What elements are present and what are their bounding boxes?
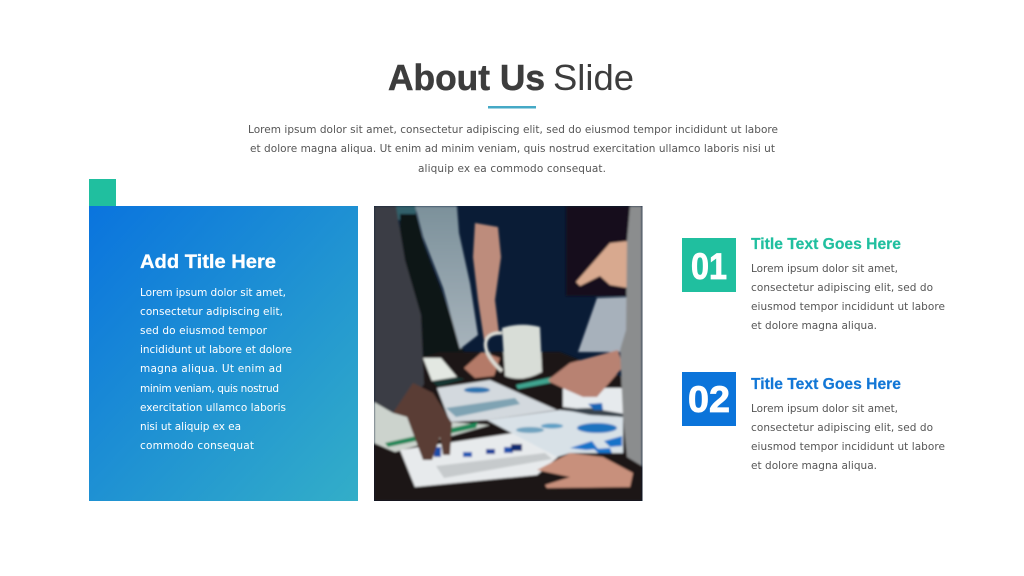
card body text: nisi ut aliquip ex ea bbox=[140, 421, 241, 433]
hand holding pen bbox=[548, 350, 623, 397]
title: Slide bbox=[553, 57, 634, 98]
card body text: Lorem ipsum dolor sit amet, bbox=[140, 287, 286, 299]
laptop bbox=[578, 297, 628, 352]
card body text: exercitation ullamco laboris bbox=[140, 402, 286, 414]
panel: blue text card bbox=[89, 206, 358, 501]
number badge 01 bbox=[682, 238, 736, 292]
paper left green chart bbox=[374, 402, 490, 452]
dark vest bbox=[400, 214, 464, 372]
dark upper right backdrop bbox=[566, 206, 636, 296]
teal glimpse behind jacket bbox=[394, 206, 416, 220]
item 01 body: eiusmod tempor incididunt ut labore bbox=[751, 301, 945, 313]
item 02 bbox=[682, 372, 945, 472]
light shirt bbox=[415, 206, 478, 349]
intro paragraph bbox=[248, 124, 778, 175]
lower right hand bbox=[537, 453, 633, 488]
card heading: Add Title Here bbox=[140, 251, 276, 273]
pointing hand bbox=[576, 241, 628, 288]
pen bbox=[514, 376, 552, 391]
title bbox=[388, 57, 634, 98]
title: About Us bbox=[388, 57, 545, 98]
item 01 body: et dolore magna aliqua. bbox=[751, 320, 877, 332]
intro paragraph: et dolore magna aliqua. Ut enim ad minim veniam, quis nostrud exercitation ullamco laboris nisi ut bbox=[250, 143, 775, 155]
card body text bbox=[140, 287, 292, 452]
item 01 bbox=[682, 236, 945, 332]
card body text: sed do eiusmod tempor bbox=[140, 325, 268, 337]
card body text: magna aliqua. Ut enim ad bbox=[140, 363, 282, 375]
right sleeve bbox=[620, 206, 642, 466]
item 02 body: Lorem ipsum dolor sit amet, bbox=[751, 403, 898, 415]
item 02 body: et dolore magna aliqua. bbox=[751, 460, 877, 472]
card body text: minim veniam, quis nostrud bbox=[140, 383, 279, 395]
item 02 heading: Title Text Goes Here bbox=[751, 376, 901, 393]
card body text: consectetur adipiscing elit, bbox=[140, 306, 283, 318]
table bbox=[374, 352, 642, 501]
title underline bbox=[488, 106, 536, 108]
left dark jacket bbox=[374, 206, 424, 413]
paper lower bars bbox=[400, 433, 558, 487]
photo: team reviewing charts at a table bbox=[374, 206, 643, 501]
intro paragraph: aliquip ex ea commodo consequat. bbox=[418, 163, 606, 175]
tablet bbox=[423, 358, 457, 381]
green accent square bbox=[89, 179, 116, 206]
number badge 02: 02 bbox=[688, 379, 730, 420]
left hand on paper bbox=[393, 383, 452, 460]
card body text: commodo consequat bbox=[140, 440, 254, 452]
item 01 body: Lorem ipsum dolor sit amet, bbox=[751, 263, 898, 275]
standing person's arm bbox=[473, 223, 501, 340]
item 02 body bbox=[751, 403, 945, 472]
item 01 body: consectetur adipiscing elit, sed do bbox=[751, 282, 933, 294]
resting hand bbox=[464, 352, 500, 378]
item 01 body bbox=[751, 263, 945, 332]
item 02 body: eiusmod tempor incididunt ut labore bbox=[751, 441, 945, 453]
mug bbox=[502, 325, 542, 379]
intro paragraph: Lorem ipsum dolor sit amet, consectetur adipiscing elit, sed do eiusmod tempor incididunt ut labore bbox=[248, 124, 778, 136]
item 02 body: consectetur adipiscing elit, sed do bbox=[751, 422, 933, 434]
paper top chart bbox=[437, 380, 557, 422]
paper right pie charts bbox=[487, 410, 623, 457]
number badge 01: 01 bbox=[691, 246, 727, 287]
number badge 02 bbox=[682, 372, 736, 426]
item 01 heading: Title Text Goes Here bbox=[751, 236, 901, 253]
card body text: incididunt ut labore et dolore bbox=[140, 344, 292, 356]
